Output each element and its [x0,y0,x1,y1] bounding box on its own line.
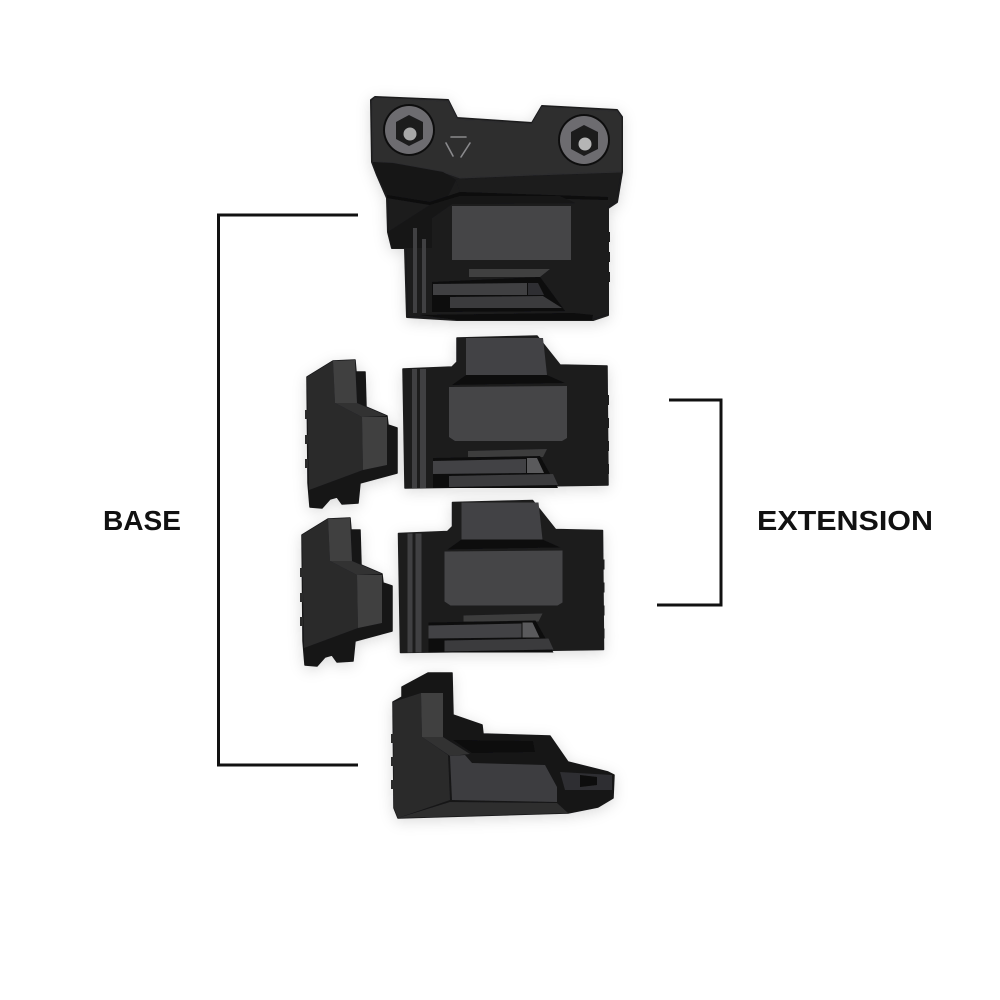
part: bottom base plate [391,673,614,818]
part: upper extension body [403,336,609,488]
bracket: base [218,215,358,765]
part: lower extension body [398,500,604,652]
bracket: extension [657,400,721,605]
icon: triangle logo [446,137,470,157]
icon: left bolt [383,104,435,156]
part: upper side clip [305,360,397,508]
label: base: BASE [103,505,181,536]
part: top base assembly with bolts [371,97,622,320]
part: lower side clip [300,518,392,666]
icon: right bolt [558,114,610,166]
label: extension: EXTENSION [757,505,933,536]
